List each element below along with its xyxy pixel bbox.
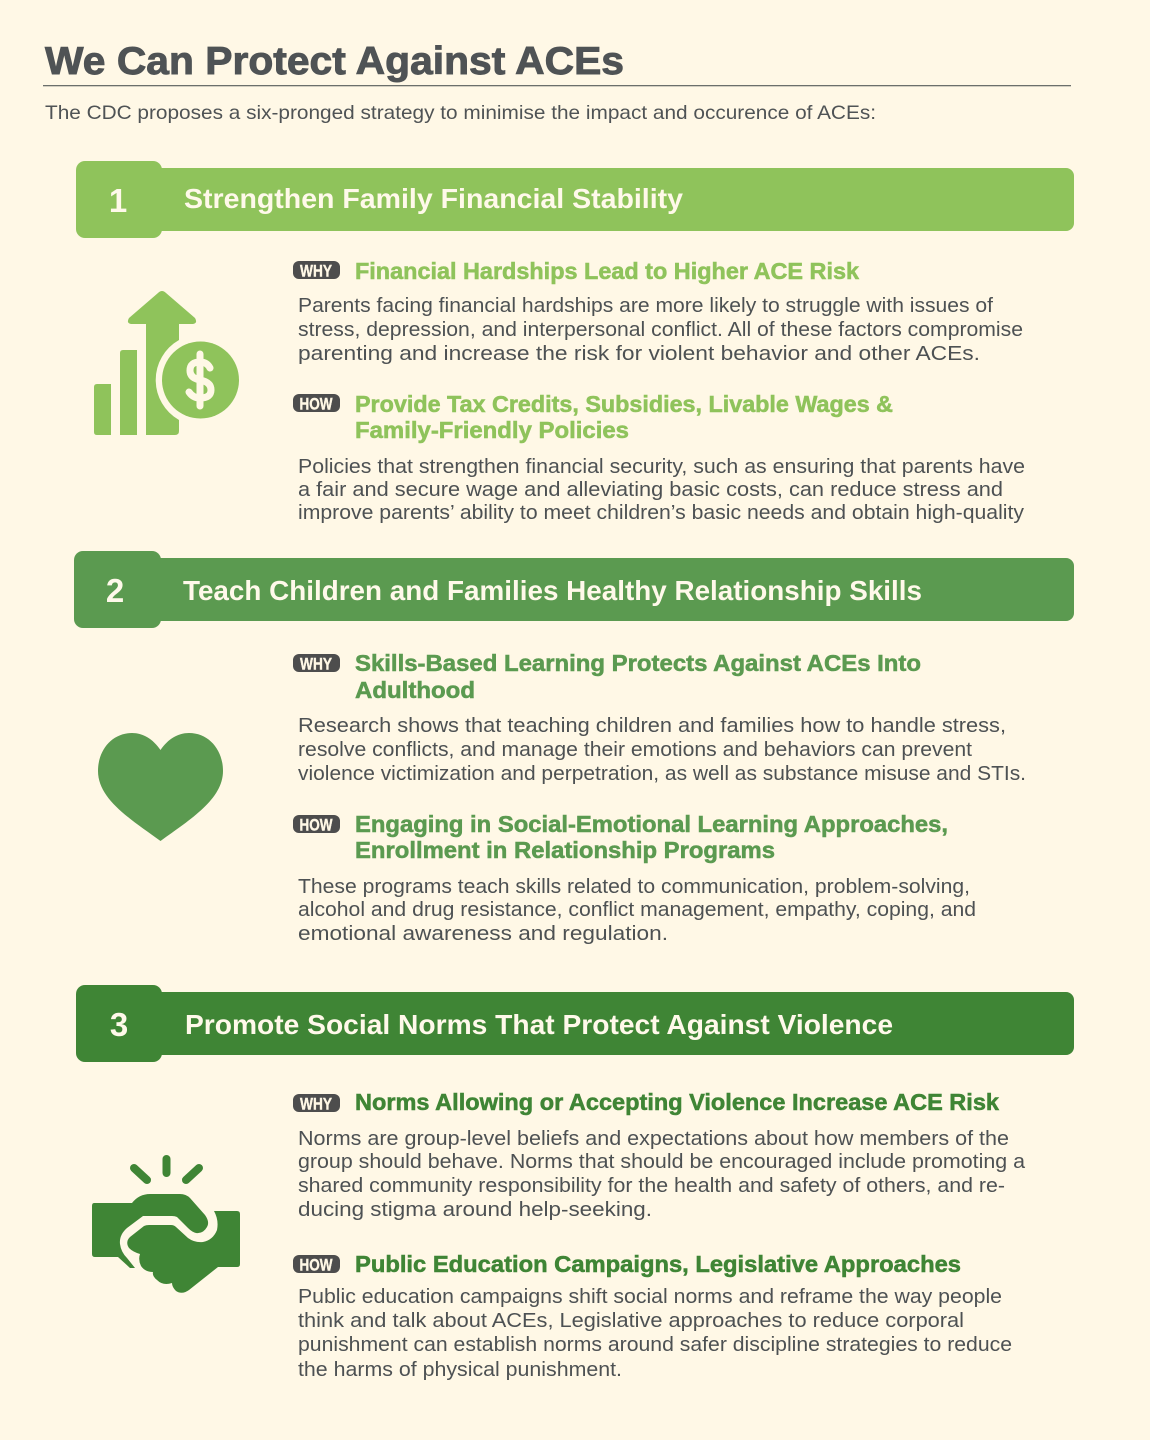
why text: stress, depression, and interpersonal conflict. All of these factors compromise: [298, 319, 1023, 341]
icon: handshake: [92, 1159, 240, 1293]
why badge: WHY: [300, 1094, 333, 1114]
why heading: Adulthood: [355, 677, 475, 703]
banner: strategy 3: 3: [110, 1006, 128, 1043]
how text: Public education campaigns shift social norms and reframe the way people: [298, 1286, 1002, 1308]
how badge: HOW: [300, 816, 333, 834]
banner: strategy 1: [76, 161, 1074, 238]
how text: punishment can establish norms around safer discipline strategies to reduce: [298, 1334, 1012, 1356]
why text: shared community responsibility for the health and safety of others, and re-: [298, 1175, 1005, 1197]
banner: strategy 2: Teach Children and Families Healthy Relationship Skills: [183, 575, 922, 606]
how text: a fair and secure wage and alleviating basic costs, can reduce stress and: [298, 479, 1003, 501]
panel: strategy 1: [76, 161, 1074, 524]
how text: [298, 876, 976, 945]
why badge: WHY: [300, 654, 333, 674]
why text: [298, 715, 1026, 785]
why badge: WHY: [300, 262, 333, 280]
banner: strategy 3: [76, 985, 1074, 1062]
how text: emotional awareness and regulation.: [298, 923, 668, 945]
why text: resolve conflicts, and manage their emotions and behaviors can prevent: [298, 739, 972, 761]
why heading: Skills-Based Learning Protects Against ACEs Into: [355, 650, 921, 676]
why text: ducing stigma around help-seeking.: [298, 1199, 652, 1221]
how text: [298, 1286, 1012, 1381]
panel: strategy 3: [76, 985, 1074, 1381]
banner: strategy 3: Promote Social Norms That Protect Against Violence: [185, 1009, 893, 1040]
how badge: HOW: [300, 1256, 333, 1274]
how heading: Enrollment in Relationship Programs: [355, 837, 775, 863]
how text: think and talk about ACEs, Legislative approaches to reduce corporal: [298, 1310, 964, 1332]
how text: alcohol and drug resistance, conflict management, empathy, coping, and: [298, 899, 976, 921]
why text: Norms are group-level beliefs and expectations about how members of the: [298, 1128, 1009, 1150]
intro text: The CDC proposes a six-pronged strategy to minimise the impact and occurence of ACEs:: [45, 102, 876, 124]
why heading: Norms Allowing or Accepting Violence Increase ACE Risk: [355, 1089, 999, 1115]
why text: Parents facing financial hardships are more likely to struggle with issues of: [298, 295, 993, 317]
icon: rising bars and dollar coin: [94, 291, 239, 435]
how text: improve parents’ ability to meet children’s basic needs and obtain high-quality: [298, 502, 1024, 524]
banner: strategy 1: 1: [109, 182, 127, 219]
why text: Research shows that teaching children and families how to handle stress,: [298, 715, 1006, 737]
how text: Policies that strengthen financial security, such as ensuring that parents have: [298, 456, 1025, 478]
why text: parenting and increase the risk for violent behavior and other ACEs.: [298, 343, 980, 365]
why text: violence victimization and perpetration, as well as substance misuse and STIs.: [298, 763, 1026, 785]
how text: These programs teach skills related to communication, problem-solving,: [298, 876, 970, 898]
why heading: [355, 650, 921, 703]
icon: heart: [98, 733, 223, 841]
panel: strategy 2: [74, 551, 1074, 945]
why text: [298, 295, 1023, 365]
how heading: [355, 811, 948, 863]
how heading: Public Education Campaigns, Legislative Approaches: [355, 1251, 961, 1277]
banner: strategy 2: [74, 551, 1074, 628]
title: We Can Protect Against ACEs: [45, 40, 624, 83]
how text: [298, 456, 1025, 524]
how heading: Provide Tax Credits, Subsidies, Livable Wages &: [355, 391, 893, 417]
why text: [298, 1128, 1026, 1221]
how heading: Family-Friendly Policies: [355, 417, 629, 443]
how badge: HOW: [300, 394, 333, 414]
banner: strategy 2: 2: [106, 572, 124, 609]
why heading: Financial Hardships Lead to Higher ACE Risk: [355, 258, 859, 284]
banner: strategy 1: Strengthen Family Financial Stability: [184, 183, 683, 214]
how text: the harms of physical punishment.: [298, 1359, 622, 1381]
how heading: [355, 391, 893, 443]
why text: group should behave. Norms that should be encouraged include promoting a: [298, 1151, 1026, 1173]
how heading: Engaging in Social-Emotional Learning Approaches,: [355, 811, 948, 837]
